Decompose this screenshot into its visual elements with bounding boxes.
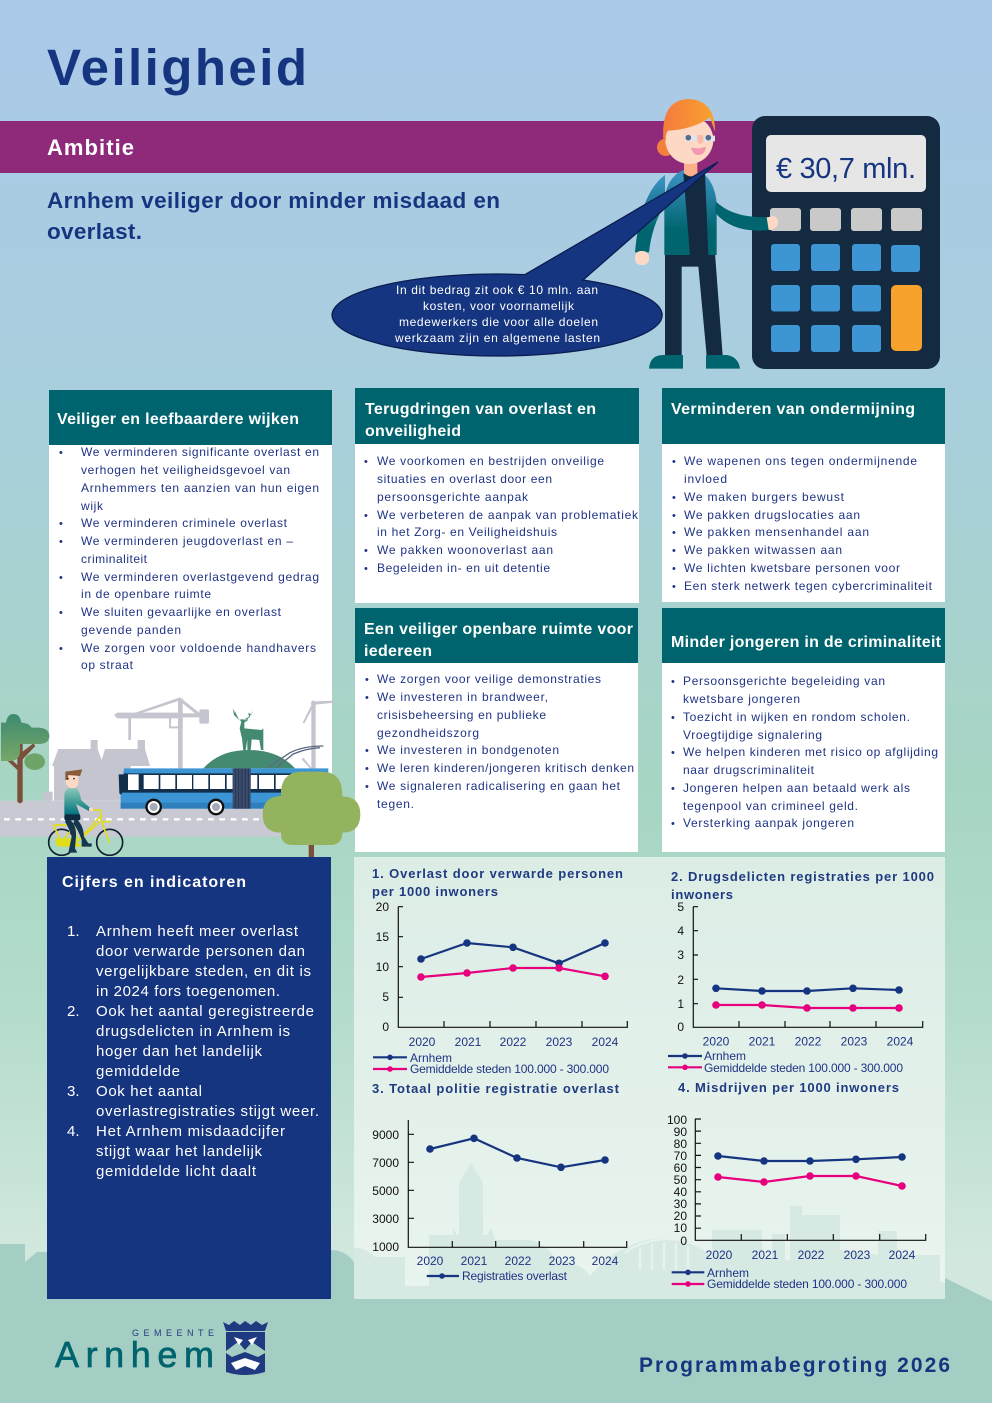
calculator blue keys [771, 244, 920, 352]
bullet list: crisisbeheersing en publieke [377, 708, 546, 722]
chart legend [373, 1051, 609, 1076]
numbered list [67, 923, 319, 1180]
bullet list: • [364, 563, 368, 575]
heading: Verminderen van ondermijning [671, 401, 915, 418]
numbered list: vergelijkbare steden, en dit is [96, 963, 311, 980]
chart 3: totaal politie registratie overlast: 7000 [372, 1156, 399, 1170]
numbered list: in 2024 fors toegenomen. [96, 983, 280, 1000]
chart 3: totaal politie registratie overlast: 2023 [549, 1254, 576, 1268]
bullet list: • [365, 781, 369, 793]
bullet list: We verminderen criminele overlast [81, 516, 288, 530]
heading: Veiliger en leefbaardere wijken [57, 411, 299, 428]
bullet list [671, 674, 938, 830]
chart title: 1. Overlast door verwarde personen [372, 866, 623, 881]
heading: onveiligheid [365, 423, 461, 440]
bullet list: We lichten kwetsbare personen voor [684, 561, 900, 575]
chart 1: overlast door verwarde personen: 2023 [546, 1035, 573, 1049]
bullet list: tegenpool van crimineel geld. [683, 799, 858, 813]
calculator display: € 30,7 mln. [776, 153, 916, 185]
chart 1: overlast door verwarde personen: 2022 [500, 1035, 527, 1049]
bullet list: We pakken witwassen aan [684, 543, 842, 557]
numbered list: Ook het aantal [96, 1083, 202, 1100]
bullet list: • [672, 545, 676, 557]
panel: veiliger openbare ruimte [355, 608, 638, 852]
bullet list: We pakken woonoverlast aan [377, 543, 553, 557]
bullet list: • [672, 510, 676, 522]
bullet list: op straat [81, 658, 134, 672]
heading: Cijfers en indicatoren [62, 874, 246, 891]
chart 3: totaal politie registratie overlast: 2020 [417, 1254, 444, 1268]
numbered list: 4. [67, 1123, 80, 1140]
chart 1: overlast door verwarde personen: 2021 [455, 1035, 482, 1049]
bullet list: We voorkomen en bestrijden onveilige [377, 454, 604, 468]
bullet list: • [364, 456, 368, 468]
chart title [372, 866, 623, 899]
chart 3: totaal politie registratie overlast: 9000 [372, 1128, 399, 1142]
numbered list: stijgt waar het landelijk [96, 1143, 262, 1160]
bullet list: • [672, 456, 676, 468]
bullet list [672, 454, 933, 593]
chart title: 2. Drugsdelicten registraties per 1000 [671, 869, 934, 884]
chart legend [668, 1049, 903, 1075]
bullet list: We pakken mensenhandel aan [684, 525, 869, 539]
bullet list: wijk [80, 499, 104, 513]
bullet list: Een sterk netwerk tegen cybercriminaliteit [684, 579, 933, 593]
heading: Terugdringen van overlast en [365, 401, 596, 418]
panel: veiliger en leefbaardere wijken [49, 390, 332, 805]
icon: calculator [752, 116, 940, 369]
chart 1: overlast door verwarde personen: 20 [376, 900, 389, 914]
chart 4: misdrijven per 1000 inwoners [667, 1080, 926, 1291]
chart 4: misdrijven per 1000 inwoners: 100 [667, 1113, 687, 1127]
panel: minder jongeren in de criminaliteit [662, 608, 945, 852]
bullet list: We verminderen significante overlast en [81, 445, 319, 459]
numbered list: Arnhem heeft meer overlast [96, 923, 299, 940]
callout text: In dit bedrag zit ook € 10 mln. aan [396, 283, 598, 297]
bullet list [365, 672, 634, 811]
chart legend: Gemiddelde steden 100.000 - 300.000 [410, 1062, 609, 1076]
bullet list: criminaliteit [81, 552, 148, 566]
chart 4: misdrijven per 1000 inwoners: 10 [674, 1221, 687, 1235]
bullet list [364, 454, 639, 575]
panel: cijfers en indicatoren [47, 857, 331, 1299]
heading: iedereen [364, 643, 432, 660]
bullet list: Begeleiden in- en uit detentie [377, 561, 550, 575]
bullet list: kwetsbare jongeren [683, 692, 800, 706]
numbered list: 3. [67, 1083, 80, 1100]
chart 2: drugsdelicten registraties: 3 [677, 948, 684, 962]
bullet list: • [671, 712, 675, 724]
bullet list: • [672, 581, 676, 593]
bullet list: tegen. [377, 797, 414, 811]
wind turbine [302, 701, 335, 768]
chart 2: drugsdelicten registraties: 0 [677, 1020, 684, 1034]
ambition statement [47, 188, 500, 244]
bullet list: • [59, 607, 63, 619]
bullet list: We verbeteren de aanpak van problematiek [377, 508, 639, 522]
bullet list: We maken burgers bewust [684, 490, 845, 504]
chart 4: misdrijven per 1000 inwoners: 30 [674, 1197, 687, 1211]
ambition statement: overlast. [47, 219, 142, 244]
crane [114, 697, 209, 768]
chart legend: Arnhem [707, 1266, 749, 1280]
chart 4: misdrijven per 1000 inwoners: 60 [674, 1161, 687, 1175]
chart 2: drugsdelicten registraties: 5 [677, 900, 684, 914]
chart 2: drugsdelicten registraties: 2020 [703, 1035, 730, 1049]
heading [364, 621, 633, 660]
chart 2: drugsdelicten registraties: 1 [677, 997, 684, 1011]
bullet list: We signaleren radicalisering en gaan het [377, 779, 621, 793]
heading: Een veiliger openbare ruimte voor [364, 621, 633, 638]
logo: gemeente arnhem [55, 1321, 268, 1375]
bullet list: situaties en overlast door een [377, 472, 552, 486]
chart 2: drugsdelicten registraties: 2022 [795, 1035, 822, 1049]
background skyline hills [0, 1244, 992, 1403]
chart 4: misdrijven per 1000 inwoners: 2021 [752, 1248, 779, 1262]
logo: gemeente arnhem: GEMEENTE [132, 1328, 214, 1338]
callout text [394, 283, 600, 345]
chart 2: drugsdelicten registraties: 2023 [841, 1035, 868, 1049]
chart title: inwoners [671, 887, 733, 902]
bullet list [59, 445, 319, 672]
calculator orange key [891, 285, 922, 351]
bus [119, 768, 328, 815]
numbered list: door verwarde personen dan [96, 943, 305, 960]
chart 3: totaal politie registratie overlast: 2024 [592, 1254, 619, 1268]
icon: big tree [263, 772, 360, 858]
chart title: per 1000 inwoners [372, 884, 498, 899]
bullet list: We verminderen overlastgevend gedrag [81, 570, 319, 584]
numbered list: gemiddelde licht daalt [96, 1163, 257, 1180]
icon: trolley wires [268, 746, 323, 767]
chart 4: misdrijven per 1000 inwoners: 2024 [889, 1248, 916, 1262]
chart 4: misdrijven per 1000 inwoners: 80 [674, 1137, 687, 1151]
chart 1: overlast door verwarde personen: 15 [376, 930, 389, 944]
numbered list: overlastregistraties stijgt weer. [96, 1103, 319, 1120]
road [0, 801, 300, 837]
chart legend: Registraties overlast [462, 1269, 568, 1283]
icon: deer [233, 708, 263, 751]
chart legend: Gemiddelde steden 100.000 - 300.000 [704, 1061, 903, 1075]
bullet list: Persoonsgerichte begeleiding van [683, 674, 885, 688]
chart 4: misdrijven per 1000 inwoners: 2023 [844, 1248, 871, 1262]
bullet list: We zorgen voor veilige demonstraties [377, 672, 601, 686]
bullet list: • [59, 572, 63, 584]
bullet list: verhogen het veiligheidsgevoel van [81, 463, 290, 477]
chart 3: totaal politie registratie overlast: 2022 [505, 1254, 532, 1268]
bullet list: in het Zorg- en Veiligheidshuis [377, 525, 557, 539]
bullet list: • [672, 563, 676, 575]
ambition banner [0, 121, 760, 173]
numbered list: Ook het aantal geregistreerde [96, 1003, 314, 1020]
chart 3: totaal politie registratie overlast: 2021 [461, 1254, 488, 1268]
icon: cyclist [49, 769, 123, 855]
chart title [671, 869, 934, 902]
chart legend: Arnhem [704, 1049, 746, 1063]
chart 3: totaal politie registratie overlast: 3000 [372, 1212, 399, 1226]
bullet list: • [59, 447, 63, 459]
bullet list: We verminderen jeugdoverlast en – [81, 534, 293, 548]
bullet list: • [59, 518, 63, 530]
callout text: werkzaam zijn en algemene lasten [394, 331, 600, 345]
icon: tree left [1, 714, 49, 803]
bullet list: Vroegtijdige signalering [683, 728, 822, 742]
bullet list: gezondheidszorg [377, 726, 479, 740]
bullet list: • [364, 545, 368, 557]
chart 2: drugsdelicten registraties [668, 869, 934, 1075]
chart legend [672, 1266, 907, 1291]
panel: verminderen van ondermijning [662, 388, 945, 602]
bullet list: We zorgen voor voldoende handhavers [81, 641, 316, 655]
bullet list: • [671, 783, 675, 795]
bullet list: Toezicht in wijken en rondom scholen. [683, 710, 910, 724]
bullet list: naar drugscriminaliteit [683, 763, 815, 777]
chart 4: misdrijven per 1000 inwoners: 2022 [798, 1248, 825, 1262]
bullet list: • [365, 745, 369, 757]
chart 4: misdrijven per 1000 inwoners: 20 [674, 1209, 687, 1223]
chart 3: totaal politie registratie overlast: 1000 [372, 1240, 399, 1254]
bullet list: We wapenen ons tegen ondermijnende [684, 454, 917, 468]
chart 4: misdrijven per 1000 inwoners: 40 [674, 1185, 687, 1199]
numbered list: 1. [67, 923, 80, 940]
bullet list: Jongeren helpen aan betaald werk als [683, 781, 910, 795]
bullet list: in de openbare ruimte [81, 587, 211, 601]
calculator display [766, 135, 926, 192]
calculator grey keys [770, 208, 922, 231]
chart title: 3. Totaal politie registratie overlast [372, 1081, 620, 1096]
bullet list: We sluiten gevaarlijke en overlast [81, 605, 282, 619]
bullet list: • [671, 747, 675, 759]
heading: Minder jongeren in de criminaliteit [671, 634, 942, 651]
title: Veiligheid [47, 39, 307, 96]
chart legend: Gemiddelde steden 100.000 - 300.000 [707, 1277, 907, 1291]
bullet list: invloed [684, 472, 727, 486]
icon: coat of arms [223, 1321, 268, 1375]
chart 4: misdrijven per 1000 inwoners: 90 [674, 1125, 687, 1139]
chart 4: misdrijven per 1000 inwoners: 2020 [706, 1248, 733, 1262]
hill [203, 750, 295, 768]
bullet list: gevende panden [81, 623, 181, 637]
chart 2: drugsdelicten registraties: 2 [677, 973, 684, 987]
bullet list: We helpen kinderen met risico op afglijding [683, 745, 938, 759]
chart 4: misdrijven per 1000 inwoners: 50 [674, 1173, 687, 1187]
bullet list: • [59, 536, 63, 548]
chart 3: totaal politie registratie overlast: 5000 [372, 1184, 399, 1198]
chart 1: overlast door verwarde personen: 2020 [409, 1035, 436, 1049]
chart 4: misdrijven per 1000 inwoners: 0 [680, 1234, 687, 1248]
chart 2: drugsdelicten registraties: 4 [677, 924, 684, 938]
bullet list: • [365, 674, 369, 686]
bullet list: We investeren in brandweer, [377, 690, 548, 704]
chart 4: misdrijven per 1000 inwoners: 70 [674, 1149, 687, 1163]
callout: speech bubble [332, 162, 718, 356]
bullet list: • [365, 692, 369, 704]
footer label: Programmabegroting 2026 [639, 1354, 950, 1377]
bullet list: • [364, 510, 368, 522]
numbered list: Het Arnhem misdaadcijfer [96, 1123, 285, 1140]
ambition statement: Arnhem veiliger door minder misdaad en [47, 188, 500, 213]
bullet list: Arnhemmers ten aanzien van hun eigen [81, 481, 319, 495]
callout text: medewerkers die voor alle doelen [399, 315, 598, 329]
bullet list: • [671, 676, 675, 688]
icon: person pointing at calculator [635, 99, 778, 369]
chart 1: overlast door verwarde personen: 0 [382, 1020, 389, 1034]
chart title: 4. Misdrijven per 1000 inwoners [678, 1080, 899, 1095]
panel: terugdringen van overlast [355, 388, 639, 603]
illustration: street scene [0, 697, 360, 858]
numbered list: hoger dan het landelijk [96, 1043, 262, 1060]
logo: gemeente arnhem: Arnhem [55, 1334, 214, 1375]
chart 2: drugsdelicten registraties: 2024 [887, 1035, 914, 1049]
bullet list: • [672, 492, 676, 504]
bullet list: • [671, 818, 675, 830]
chart 1: overlast door verwarde personen [372, 866, 627, 1076]
numbered list: 2. [67, 1003, 80, 1020]
chart 2: drugsdelicten registraties: 2021 [749, 1035, 776, 1049]
chart legend: Arnhem [410, 1051, 452, 1065]
houses [43, 740, 150, 801]
bullet list: We investeren in bondgenoten [377, 743, 559, 757]
callout text: kosten, voor voornamelijk [423, 299, 575, 313]
chart 1: overlast door verwarde personen: 2024 [592, 1035, 619, 1049]
chart 1: overlast door verwarde personen: 5 [382, 990, 389, 1004]
numbered list: gemiddelde [96, 1063, 180, 1080]
bullet list: We leren kinderen/jongeren kritisch denken [377, 761, 634, 775]
heading [365, 401, 596, 440]
chart 1: overlast door verwarde personen: 10 [376, 960, 389, 974]
bullet list: • [672, 527, 676, 539]
panel: charts background with skyline [354, 857, 945, 1299]
numbered list: drugsdelicten in Arnhem is [96, 1023, 290, 1040]
banner heading: Ambitie [47, 135, 134, 160]
bullet list: persoonsgerichte aanpak [377, 490, 529, 504]
bullet list: • [365, 763, 369, 775]
bullet list: We pakken drugslocaties aan [684, 508, 860, 522]
chart 3: totaal politie registratie overlast [372, 1081, 627, 1283]
bullet list: Versterking aanpak jongeren [683, 816, 854, 830]
bullet list: • [59, 643, 63, 655]
